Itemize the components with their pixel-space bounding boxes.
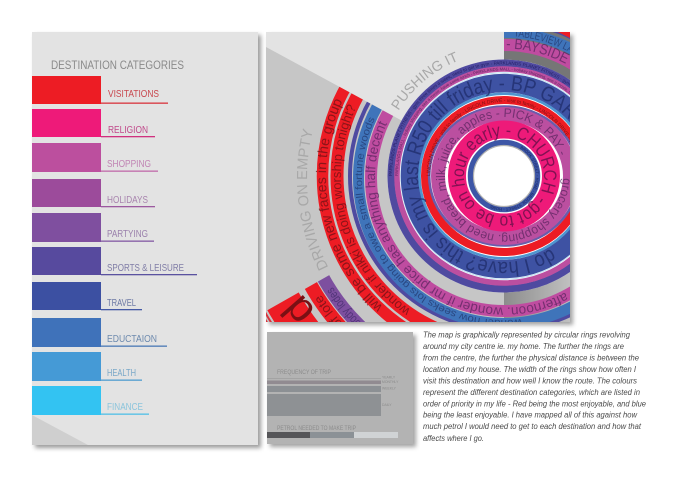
petrol heading: PETROL NEEDED TO MAKE TRIP — [277, 425, 356, 432]
legend item: visitations: VISITATIONS — [108, 89, 159, 100]
legend item: holidays — [32, 179, 155, 207]
text block: explanation: being the least enjoyable. I have mapped all of this against how — [423, 410, 638, 420]
ring text: bayside: - BAYSIDE COAST — [506, 38, 570, 64]
text block: explanation: from the centre, the further the physical distance is between the — [423, 354, 640, 362]
panel: destination categories legend — [32, 32, 261, 448]
legend item: education: EDUCTAION — [107, 334, 157, 345]
legend item: health: HEALTH — [107, 368, 136, 379]
frequency labels: YEARLY — [382, 376, 396, 380]
legend item: travel: TRAVEL — [107, 298, 136, 309]
panel: radial ring map — [266, 32, 570, 322]
frequency labels: DAILY — [382, 403, 392, 407]
ring text: worship tonight: wonder if nikki is doing worship tonight? — [332, 104, 409, 316]
legend item: shopping: SHOPPING — [107, 159, 151, 170]
ring text: body lodes: body lodes — [328, 288, 360, 322]
legend item: finance: FINANCE — [107, 402, 143, 413]
ring text: new faces in the group: will be some new faces in the group — [316, 99, 382, 312]
ring text: tiny blue: BROOK STREET - HOME - BROOK STREET - HOME — [490, 146, 539, 211]
text block: explanation — [423, 330, 647, 443]
legend item: religion: RELIGION — [108, 125, 148, 136]
text block: explanation: The map is graphically represented by circular rings revolving — [423, 330, 631, 340]
legend item: visitations — [32, 76, 168, 104]
legend item: sports and leisure: SPORTS & LEISURE — [107, 263, 184, 274]
label: driving on empty: DRIVING ON EMPTY — [297, 128, 328, 271]
text block: explanation: much petrol I would need to get to each destination and how that — [423, 422, 642, 431]
panel: frequency and petrol key — [267, 332, 416, 447]
middle rings, cut by pushing-it wedge — [316, 32, 570, 322]
legend heading: DESTINATION CATEGORIES — [51, 58, 184, 72]
frequency bars — [267, 378, 381, 416]
text block: explanation: order of priority in my life - Red being the most enjoyable, and blue — [423, 400, 647, 408]
legend item: religion — [32, 109, 155, 137]
text block: explanation: around my city centre ie. my home. The further the rings are — [423, 342, 625, 351]
legend item: health — [32, 352, 142, 381]
legend item: partying — [32, 213, 154, 242]
outer rings, lower left — [266, 275, 366, 322]
ring text: pick and pay: grocery shopping. need bread, milk, juice, apples - PICK & PAY - — [436, 108, 570, 243]
label: pushing it: PUSHING IT — [391, 52, 456, 110]
legend item: finance — [32, 386, 149, 415]
frequency labels: WEEKLY — [382, 386, 397, 390]
ring text: church: got to be on hour early - CHURCH - — [452, 125, 556, 228]
ring text: mr price: afternoon. wonder if mr price has anything half decent — [365, 121, 568, 315]
legend item: shopping — [32, 143, 158, 172]
frequency labels — [382, 376, 399, 407]
ring text: tiny magenta: PARKLANDS MALL - holiday shopping, see a movie, have some lunch - PARKLANDS MALL - holiday shopping, see a movie, have some lunch — [395, 68, 570, 176]
corner red — [558, 32, 570, 38]
legend item: travel — [32, 282, 142, 310]
legend item: education — [32, 318, 167, 347]
text block: explanation: visit this destination and how well I know the route. The colours — [423, 376, 637, 386]
inner rings — [388, 60, 570, 292]
legend item: sports and leisure — [32, 247, 197, 275]
frequency labels: MONTHLY — [382, 380, 399, 384]
panel: radial map shadow — [269, 35, 573, 325]
legend item: holidays: HOLIDAYS — [107, 195, 148, 206]
text block: explanation: affects where I go. — [423, 434, 484, 443]
text block: explanation: represent the different destination categories, which are listed in — [423, 388, 641, 397]
petrol bar — [267, 432, 398, 438]
ring text: BP garage: do I have? this is my last R50 till friday - BP GARAGE — [404, 76, 570, 276]
text block: explanation: location and my house. The width of the rings show how often I — [423, 365, 637, 374]
legend item: partying: PARTYING — [107, 229, 148, 240]
ring text: tiny red: LINCOLN DRIVE - visit to family - LINCOLN DRIVE - visit to family - LINCOLN DRIVE - visit — [426, 98, 570, 176]
ring text: tableview: TABLEVIEW LANE — [516, 32, 570, 51]
ring text: lote: lots of lote — [316, 296, 342, 322]
large letter on the outermost red ring: d — [272, 287, 323, 336]
ring text: small fortune woods: wonder how seeks lots going to owe a small fortune woods — [355, 118, 522, 322]
ring text: tiny purple: PARKLANDS PLANET FITNESS - gym three times a week, need to get to gym - PARKLANDS PLANET FITNESS - gym three times a week, need to get to gym — [388, 61, 570, 176]
frequency heading: FREQUENCY OF TRIP — [277, 369, 331, 376]
